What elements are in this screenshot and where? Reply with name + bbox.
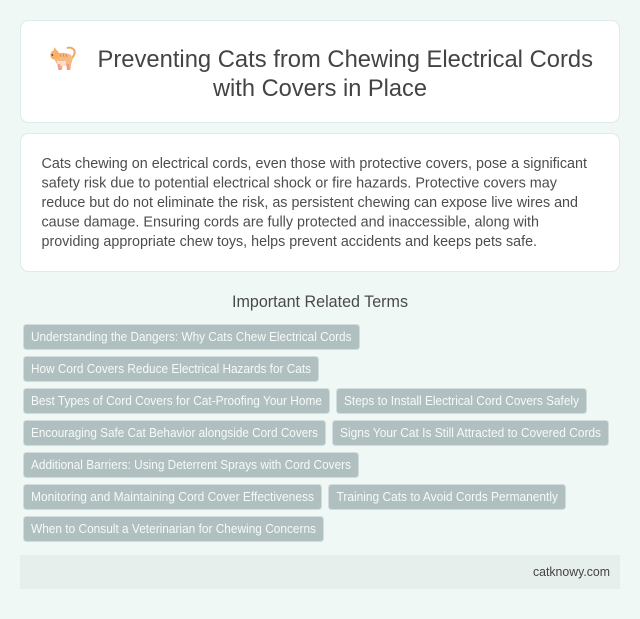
term chip: Best Types of Cord Covers for Cat-Proofing Your Home (31, 394, 322, 408)
term chip (332, 420, 608, 446)
term chip (24, 452, 358, 478)
term chip: Training Cats to Avoid Cords Permanently (336, 490, 559, 504)
term chip (24, 356, 318, 382)
related terms list (24, 324, 608, 542)
term chip: Signs Your Cat Is Still Attracted to Covered Cords (340, 426, 601, 440)
footer source text: catknowy.com (533, 565, 610, 579)
summary paragraph: cause damage. Ensuring cords are fully protected and inaccessible, along with (42, 214, 539, 230)
summary paragraph: providing appropriate chew toys, helps prevent accidents and keeps pets safe. (42, 234, 537, 250)
summary paragraph: safety risk due to potential electrical shock or fire hazards. Protective covers may (42, 176, 558, 192)
icon: cat (50, 47, 75, 70)
term chip: When to Consult a Veterinarian for Chewing Concerns (31, 522, 316, 536)
summary paragraph: reduce but do not eliminate the risk, as persistent chewing can expose live wires and (42, 195, 578, 211)
title text (98, 46, 593, 102)
term chip: Monitoring and Maintaining Cord Cover Effectiveness (31, 490, 314, 504)
term chip: Understanding the Dangers: Why Cats Chew Electrical Cords (31, 330, 352, 344)
term chip: Steps to Install Electrical Cord Covers Safely (344, 394, 580, 408)
title text: with Covers in Place (212, 75, 427, 102)
term chip: How Cord Covers Reduce Electrical Hazards for Cats (31, 362, 311, 376)
footer (20, 555, 620, 589)
heading: important related terms: Important Related Terms (232, 293, 408, 311)
title panel (20, 20, 620, 122)
term chip: Additional Barriers: Using Deterrent Sprays with Cord Covers (31, 458, 351, 472)
title text: Preventing Cats from Chewing Electrical Cords (98, 46, 593, 73)
summary paragraph: Cats chewing on electrical cords, even those with protective covers, pose a significant (42, 156, 587, 172)
term chip (24, 420, 326, 446)
term chip (336, 388, 586, 414)
summary paragraph (42, 156, 587, 250)
panel: summary (20, 134, 620, 272)
term chip (24, 484, 322, 510)
term chip (24, 324, 360, 350)
term chip (24, 516, 324, 542)
term chip (24, 388, 330, 414)
term chip: Encouraging Safe Cat Behavior alongside Cord Covers (31, 426, 318, 440)
term chip (328, 484, 566, 510)
